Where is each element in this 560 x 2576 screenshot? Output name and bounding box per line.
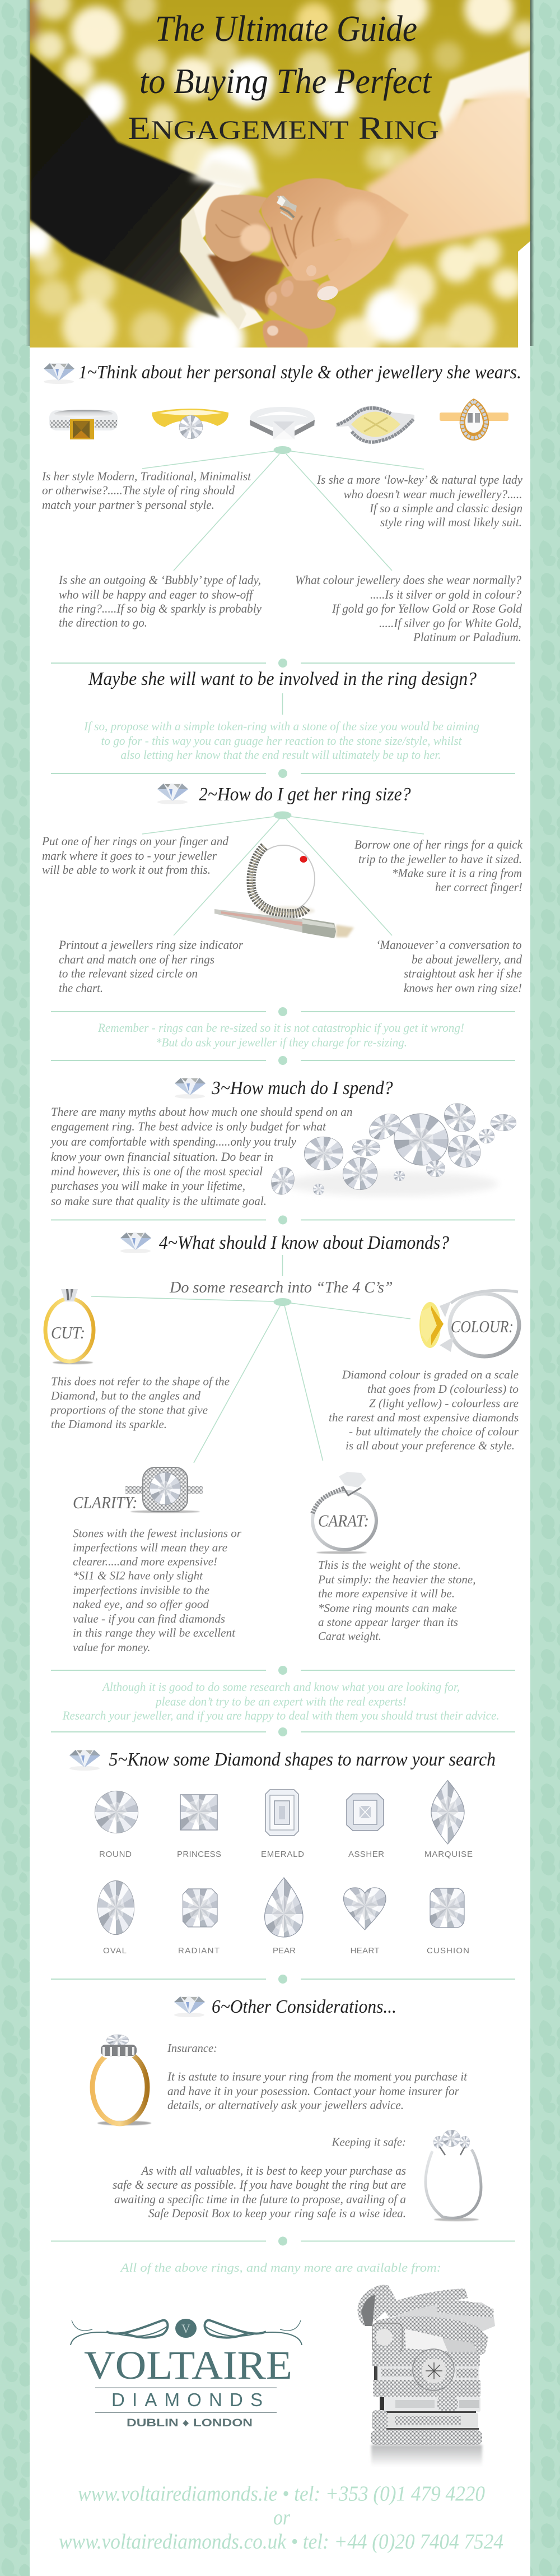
- text: manouever conversation: [376, 938, 522, 995]
- text: printout chart: [58, 938, 243, 995]
- connector diagram: [91, 1296, 410, 1463]
- text: colour: the rarest and most expensive diamonds: [329, 1411, 519, 1424]
- icon: diamond: [44, 363, 74, 384]
- ring: yellow marquise with halo: [336, 406, 414, 442]
- text: clarity: *SI1 & SI2 have only slight: [73, 1569, 203, 1582]
- logo diamonds wordmark: DIAMONDS: [111, 2389, 263, 2410]
- contact details: www.voltairediamonds.ie • tel: +353 (0)1 479 4220: [78, 2482, 485, 2505]
- shape: asscher: ASSHER: [348, 1850, 384, 1859]
- groom hand: [206, 195, 270, 262]
- section 3: how much to spend: [50, 1078, 516, 1208]
- ring: carat: [312, 1472, 376, 1554]
- text: modern traditional minimalist: [41, 469, 251, 512]
- text: modern traditional minimalist: Is her style Modern, Traditional, Minimalist: [41, 469, 251, 483]
- photo shadow edges: [26, 0, 534, 346]
- image: ring sizer and mandrel: [214, 845, 354, 938]
- label: carat: CARAT:: [318, 1511, 369, 1530]
- ring: cut: [45, 1289, 94, 1364]
- text: colour jewellery: .....If silver go for White Gold,: [379, 616, 521, 630]
- shape: emerald: [261, 1790, 304, 1859]
- text: carat: a stone appear larger than its: [318, 1615, 458, 1629]
- section 1: personal style: [41, 362, 522, 644]
- mint note: trust the experts: Research your jeweller, and if you are happy to deal with them you should trust their advice.: [62, 1708, 500, 1722]
- shape: pear: [264, 1877, 304, 1953]
- heading: step 4: 4~What should I know about Diamonds?: [159, 1233, 449, 1253]
- mint note: token ring: If so, propose with a simple token-ring with a stone of the size you would be aiming: [83, 719, 479, 733]
- bride nail: [317, 286, 338, 300]
- logo: Voltaire Diamonds: [71, 2319, 302, 2429]
- ring: white gold three stone: [426, 2130, 481, 2221]
- text: keeping it safe: [113, 2135, 406, 2220]
- groom lower fingers: [265, 276, 336, 329]
- text: budget advice: so make sure that quality is the ultimate goal.: [51, 1194, 267, 1208]
- text: keeping it safe: Safe Deposit Box to keep your ring safe is a wise idea.: [148, 2206, 406, 2220]
- text: clarity: imperfections invisible to the: [73, 1583, 209, 1597]
- contact details: or: [273, 2506, 290, 2529]
- text: manouever conversation: ‘Manouever’ a conversation to: [376, 938, 522, 952]
- text: insurance: Insurance:: [167, 2041, 217, 2055]
- groom thumb: [240, 224, 270, 252]
- label: clarity: CLARITY:: [73, 1493, 138, 1512]
- logo locations: DUBLIN ♦ LONDON: [127, 2417, 253, 2429]
- text: colour jewellery: [295, 573, 522, 644]
- mint note: re-sizing: [97, 1021, 464, 1049]
- text: modern traditional minimalist: or otherwise?.....The style of ring should: [42, 483, 235, 497]
- text: carat: Carat weight.: [318, 1629, 381, 1643]
- shape: radiant: [179, 1888, 220, 1953]
- text: borrow a ring: [354, 837, 523, 894]
- text: cut: Diamond, but to the angles and: [50, 1389, 200, 1402]
- text: insurance: It is astute to insure your ring from the moment you purchase it: [167, 2069, 468, 2083]
- text: colour: Z (light yellow) - colourless are: [369, 1397, 519, 1410]
- text: borrow a ring: Borrow one of her rings for a quick: [354, 837, 523, 851]
- text: borrow a ring: trip to the jeweller to have it sized.: [358, 852, 522, 866]
- text: manouever conversation: be about jewellery, and: [412, 952, 522, 966]
- text: cut: [49, 1374, 230, 1431]
- text: colour jewellery: Platinum or Paladium.: [413, 630, 521, 644]
- text: manouever conversation: straightout ask her if she: [404, 966, 522, 980]
- title: [128, 8, 439, 146]
- text: carat: *Some ring mounts can make: [318, 1601, 457, 1615]
- text: bubbly lady: [58, 573, 262, 629]
- ring: colour: [419, 1290, 519, 1356]
- text: budget advice: you are comfortable with spending.....only you truly: [50, 1134, 296, 1148]
- text: colour: Diamond colour is graded on a scale: [342, 1368, 519, 1381]
- mint note: trust the experts: [62, 1680, 500, 1722]
- heading: step 3: 3~How much do I spend?: [211, 1078, 393, 1099]
- text: colour: [329, 1368, 519, 1452]
- shape: oval: [97, 1880, 134, 1956]
- shape: marquise: [424, 1778, 473, 1859]
- groom wrist: [208, 255, 286, 315]
- text: manouever conversation: knows her own ring size!: [404, 981, 522, 995]
- text: low-key lady: who doesn’t wear much jewellery?.....: [344, 487, 522, 501]
- text: bubbly lady: the direction to go.: [59, 615, 147, 629]
- heading: step 6: 6~Other Considerations...: [212, 1996, 396, 2017]
- text: insurance: and have it in your posession. Contact your home insurer for: [167, 2084, 459, 2098]
- subheading: the 4 Cs: Do some research into “The 4 C’s”: [169, 1278, 393, 1296]
- text: printout chart: to the relevant sized circle on: [59, 966, 198, 980]
- text: clarity: clearer.....and more expensive!: [73, 1555, 217, 1568]
- text: cut: the Diamond its sparkle.: [51, 1417, 167, 1431]
- text: insurance: details, or alternatively ask your jewellers advice.: [167, 2098, 404, 2112]
- text: bubbly lady: who will be happy and eager to show-off: [59, 587, 254, 601]
- text: low-key lady: [316, 472, 522, 529]
- text: budget advice: [50, 1105, 352, 1208]
- ring: yellow gold solitaire: [152, 409, 228, 439]
- text: borrow a ring: her correct finger!: [435, 880, 522, 894]
- ring: clarity: [73, 1467, 203, 1513]
- shape: oval: OVAL: [103, 1946, 127, 1956]
- shape: marquise: MARQUISE: [424, 1850, 473, 1859]
- text: clarity: [73, 1527, 242, 1654]
- bride hand: [262, 178, 409, 299]
- text: carat: [318, 1558, 476, 1643]
- text: printout chart: chart and match one of her rings: [59, 952, 214, 966]
- wedding rings on finger: [277, 196, 297, 220]
- text: finger mark: will be able to work it out from this.: [42, 863, 211, 877]
- connector line: [282, 693, 283, 715]
- ring design callout: [83, 669, 479, 762]
- mint note: re-sizing: *But do ask your jeweller if they charge for re-sizing.: [156, 1035, 407, 1049]
- contact details: www.voltairediamonds.co.uk • tel: +44 (0)20 7404 7524: [59, 2530, 503, 2554]
- shape: asscher: [347, 1794, 384, 1859]
- icon: diamond: [120, 1233, 151, 1253]
- shape: princess: PRINCESS: [177, 1850, 221, 1859]
- text: keeping it safe: As with all valuables, it is best to keep your purchase as: [141, 2163, 406, 2177]
- text: low-key lady: If so a simple and classic design: [369, 501, 522, 515]
- groom suit sleeve: [30, 53, 220, 318]
- title: The Ultimate Guide: [155, 8, 417, 49]
- text: low-key lady: style ring will most likely suit.: [380, 515, 522, 529]
- text: clarity: imperfections will mean they are: [73, 1541, 227, 1554]
- shape: round: ROUND: [99, 1850, 132, 1859]
- shape: heart: [343, 1887, 386, 1953]
- ring: rose gold pear halo: [440, 399, 508, 441]
- footer panel: [59, 2260, 503, 2554]
- mint note: re-sizing: Remember - rings can be re-sized so it is not catastrophic if you get it wrong!: [97, 1021, 464, 1035]
- text: cut: This does not refer to the shape of the: [51, 1374, 230, 1388]
- text: keeping it safe: Keeping it safe:: [332, 2135, 406, 2149]
- shape: emerald: EMERALD: [261, 1850, 304, 1859]
- text: colour jewellery: What colour jewellery does she wear normally?: [295, 573, 521, 587]
- text: keeping it safe: safe & secure as possible. If you have bought the ring but are: [113, 2177, 406, 2192]
- connector diagram: [142, 446, 424, 571]
- section 5: diamond shapes: [69, 1749, 496, 1956]
- text: budget advice: know your own financial situation. Do bear in: [51, 1150, 273, 1164]
- heading: step 2: 2~How do I get her ring size?: [199, 784, 411, 805]
- mint note: trust the experts: Although it is good to do some research and know what you are looking for,: [101, 1680, 460, 1694]
- mint note: token ring: to go for - this way you can guage her reaction to the stone size/style, whilst: [101, 734, 462, 748]
- heading: step 5: 5~Know some Diamond shapes to narrow your search: [109, 1749, 496, 1770]
- ring row: [49, 399, 508, 442]
- section 6: other considerations: [92, 1996, 481, 2221]
- text: colour: is all about your preference & style.: [346, 1439, 515, 1452]
- text: colour jewellery: If gold go for Yellow Gold or Rose Gold: [332, 601, 522, 615]
- text: finger mark: Put one of her rings on your finger and: [41, 834, 229, 848]
- label: cut: CUT:: [51, 1323, 85, 1342]
- icon: diamond: [69, 1750, 100, 1771]
- shirt cuff: [180, 184, 263, 330]
- logo flourish: [71, 2319, 302, 2345]
- text: carat: This is the weight of the stone.: [318, 1558, 461, 1572]
- text: colour: - but ultimately the choice of colour: [349, 1425, 519, 1438]
- text: clarity: value for money.: [73, 1641, 150, 1654]
- shape: pear: PEAR: [273, 1946, 296, 1956]
- text: clarity: value - if you can find diamonds: [73, 1612, 225, 1625]
- mint note: trust the experts: please don’t try to be an expert with the real experts!: [155, 1694, 407, 1708]
- text: clarity: in this range they will be excellent: [73, 1626, 236, 1639]
- connector line: [282, 1255, 283, 1276]
- section 4: diamonds and the four Cs: [45, 1233, 519, 1654]
- bride arm: [364, 91, 530, 249]
- label: colour: COLOUR:: [451, 1317, 514, 1336]
- text: clarity: Stones with the fewest inclusions or: [73, 1527, 242, 1540]
- text: printout chart: the chart.: [59, 981, 103, 995]
- shape: cushion: [427, 1888, 469, 1953]
- text: modern traditional minimalist: match your partner’s personal style.: [42, 498, 214, 512]
- shape: radiant: RADIANT: [178, 1946, 220, 1956]
- text: budget advice: engagement ring. The best advice is only budget for what: [51, 1119, 326, 1133]
- text: finger mark: [41, 834, 229, 877]
- text: insurance: [167, 2041, 468, 2112]
- section 2: ring size: [41, 784, 523, 995]
- text: budget advice: mind however, this is one of the most special: [51, 1164, 263, 1178]
- text: budget advice: purchases you will make in your lifetime,: [50, 1179, 245, 1193]
- text: bubbly lady: Is she an outgoing & ‘Bubbly’ type of lady,: [58, 573, 261, 587]
- text: borrow a ring: *Make sure it is a ring from: [392, 866, 522, 880]
- text: keeping it safe: awaiting a specific time in the future to propose, availing of a: [114, 2192, 406, 2206]
- white dress: [437, 49, 530, 133]
- text: budget advice: There are many myths about how much one should spend on an: [51, 1105, 353, 1119]
- shape: princess: [178, 1794, 221, 1857]
- ring: cognac princess: [49, 410, 118, 439]
- heading: step 1: 1~Think about her personal style & other jewellery she wears.: [78, 362, 521, 383]
- shape: cushion: CUSHION: [427, 1946, 469, 1956]
- icon: diamond: [157, 784, 188, 804]
- icon: diamond: [175, 1078, 206, 1099]
- icon: diamond: [174, 1996, 205, 2017]
- text: carat: Put simply: the heavier the stone,: [318, 1573, 476, 1586]
- contact details: [59, 2482, 503, 2554]
- text: bubbly lady: the ring?.....If so big & sparkly is probably: [59, 601, 262, 615]
- subheading: ring design: Maybe she will want to be involved in the ring design?: [88, 669, 477, 689]
- text: printout chart: Printout a jewellers ring size indicator: [58, 938, 243, 952]
- mint note: available from: All of the above rings, and many more are available from:: [119, 2260, 441, 2274]
- logo wordmark: VOLTAIRE: [84, 2343, 292, 2388]
- ring: platinum princess with pave band: [250, 407, 315, 439]
- text: clarity: naked eye, and so offer good: [73, 1597, 209, 1611]
- text: colour: that goes from D (colourless) to: [367, 1382, 519, 1396]
- mint note: token ring: [83, 719, 479, 762]
- image: loose diamonds cluster: [268, 1098, 516, 1198]
- image: stacked diamond rings: [357, 2285, 495, 2467]
- shape: round: [95, 1791, 138, 1859]
- logo flourish: V: [181, 2322, 190, 2336]
- text: colour jewellery: .....Is it silver or gold in colour?: [370, 587, 521, 601]
- text: finger mark: mark where it goes to - your jeweller: [42, 849, 217, 863]
- title: ENGAGEMENT RING: [128, 110, 439, 146]
- bride fingers: [292, 238, 351, 281]
- text: cut: proportions of the stone that give: [49, 1403, 208, 1417]
- text: low-key lady: Is she a more ‘low-key’ & natural type lady: [316, 472, 522, 487]
- mint note: token ring: also letting her know that the end result will ultimately be up to her.: [121, 748, 441, 762]
- title: to Buying The Perfect: [139, 61, 432, 101]
- connector diagram: [142, 812, 424, 935]
- hero photo: clasped hands with bokeh background: [19, 0, 538, 369]
- text: carat: the more expensive it will be.: [318, 1587, 455, 1600]
- ring: gold insurance: [92, 2035, 151, 2125]
- shape: heart: HEART: [351, 1946, 380, 1956]
